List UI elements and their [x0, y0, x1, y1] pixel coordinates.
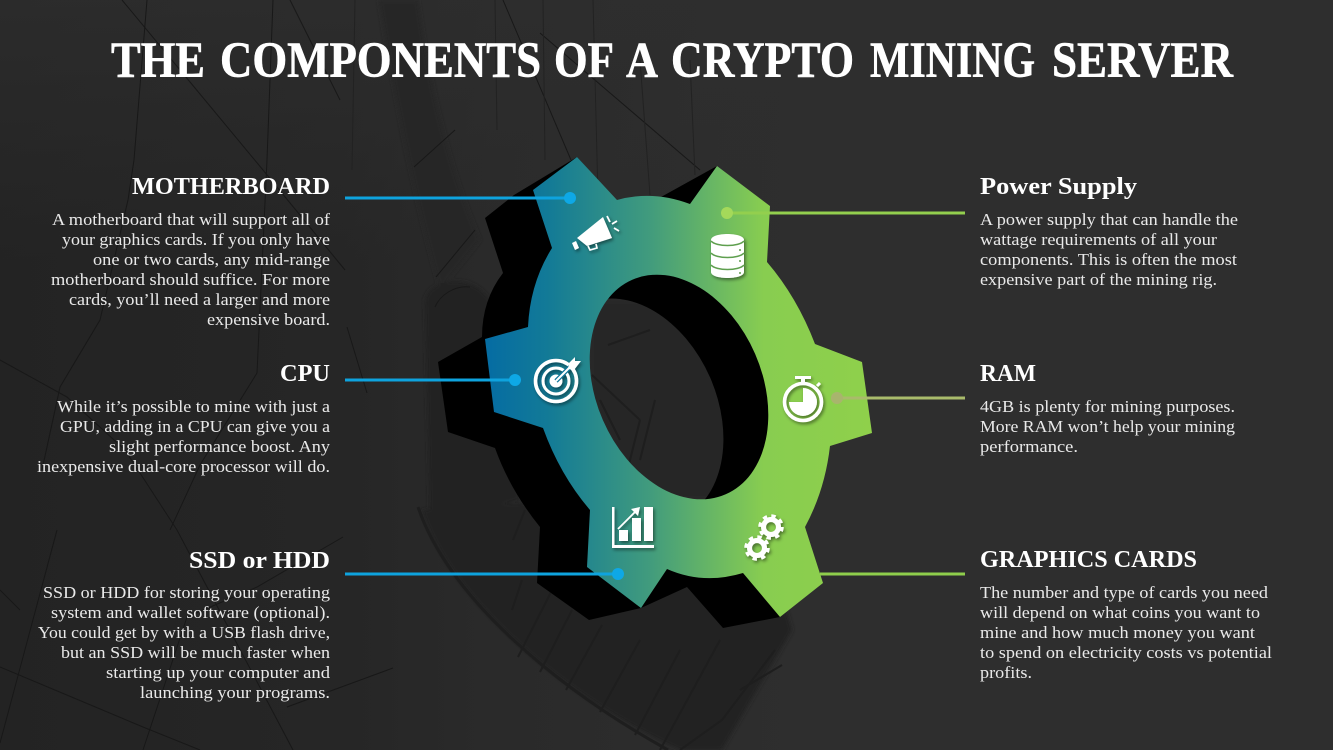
text block: ssd or hdd: [38, 548, 331, 702]
text block: ssd or hdd: starting up your computer and: [106, 663, 331, 682]
title: CRYPTO: [671, 33, 854, 89]
text block: motherboard: A motherboard that will support all of: [52, 210, 331, 229]
text block: ssd or hdd: SSD or HDD: [189, 548, 330, 574]
connector: power supply: [721, 207, 965, 219]
text block: cpu: GPU, adding in a CPU can give you a: [60, 417, 331, 436]
text block: ram: [980, 361, 1235, 456]
title: OF: [554, 33, 614, 89]
text block: ssd or hdd: launching your programs.: [140, 683, 330, 702]
text block: power supply: Power Supply: [980, 174, 1137, 200]
text block: graphics cards: profits.: [980, 663, 1032, 682]
title: COMPONENTS: [220, 33, 541, 89]
text block: motherboard: MOTHERBOARD: [132, 174, 330, 200]
text block: motherboard: motherboard should suffice. For more: [51, 270, 330, 289]
icon: target: [536, 357, 581, 402]
text block: cpu: CPU: [280, 361, 330, 387]
text block: graphics cards: to spend on electricity costs vs potential: [980, 643, 1272, 662]
title: [111, 33, 1234, 89]
text block: motherboard: your graphics cards. If you only have: [62, 230, 330, 249]
building ribs: [418, 330, 782, 750]
text block: ssd or hdd: You could get by with a USB flash drive,: [38, 623, 330, 642]
text block: motherboard: [51, 174, 331, 329]
title: SERVER: [1052, 33, 1234, 89]
text block: motherboard: cards, you’ll need a larger and more: [69, 290, 330, 309]
text block: ssd or hdd: system and wallet software (optional).: [51, 603, 330, 622]
title: THE: [111, 33, 205, 89]
text block: ram: performance.: [980, 437, 1078, 456]
text block: power supply: wattage requirements of all your: [980, 230, 1218, 249]
title: A: [626, 33, 658, 89]
text block: graphics cards: The number and type of cards you need: [980, 583, 1269, 602]
connector: cpu: [345, 374, 521, 386]
gear front: [485, 157, 872, 617]
gear graphic: [438, 157, 872, 628]
text block: cpu: inexpensive dual-core processor will do.: [37, 457, 330, 476]
text block: power supply: A power supply that can handle the: [980, 210, 1238, 229]
text block: power supply: components. This is often the most: [980, 250, 1237, 269]
text block: motherboard: expensive board.: [207, 310, 330, 329]
text block: power supply: [980, 174, 1238, 289]
icon: database: [711, 234, 744, 278]
text block: cpu: While it’s possible to mine with just a: [57, 397, 331, 416]
text block: ssd or hdd: but an SSD will be much faster when: [61, 643, 331, 662]
icon: stopwatch: [784, 376, 822, 420]
connector: motherboard: [345, 192, 576, 204]
text block: power supply: expensive part of the mining rig.: [980, 270, 1217, 289]
connector: graphics cards: [820, 572, 965, 576]
text block: graphics cards: GRAPHICS CARDS: [980, 547, 1197, 573]
text block: graphics cards: mine and how much money you want: [980, 623, 1255, 642]
title: MINING: [870, 33, 1035, 89]
text block: ram: RAM: [980, 361, 1036, 387]
text block: cpu: slight performance boost. Any: [109, 437, 331, 456]
text block: ram: More RAM won’t help your mining: [980, 417, 1235, 436]
text block: graphics cards: will depend on what coins you want to: [980, 603, 1260, 622]
icon: bar chart: [612, 507, 654, 548]
text block: ssd or hdd: SSD or HDD for storing your operating: [43, 583, 330, 602]
icon: cogs: [746, 516, 782, 559]
text block: motherboard: one or two cards, any mid-range: [93, 250, 330, 269]
connector: ram: [831, 392, 965, 404]
icon: megaphone: [572, 216, 619, 250]
gear shadow extrusion: [438, 157, 810, 628]
text block: graphics cards: [980, 547, 1272, 682]
text block: cpu: [37, 361, 331, 476]
text block: ram: 4GB is plenty for mining purposes.: [980, 397, 1235, 416]
connector: ssd: [345, 568, 624, 580]
